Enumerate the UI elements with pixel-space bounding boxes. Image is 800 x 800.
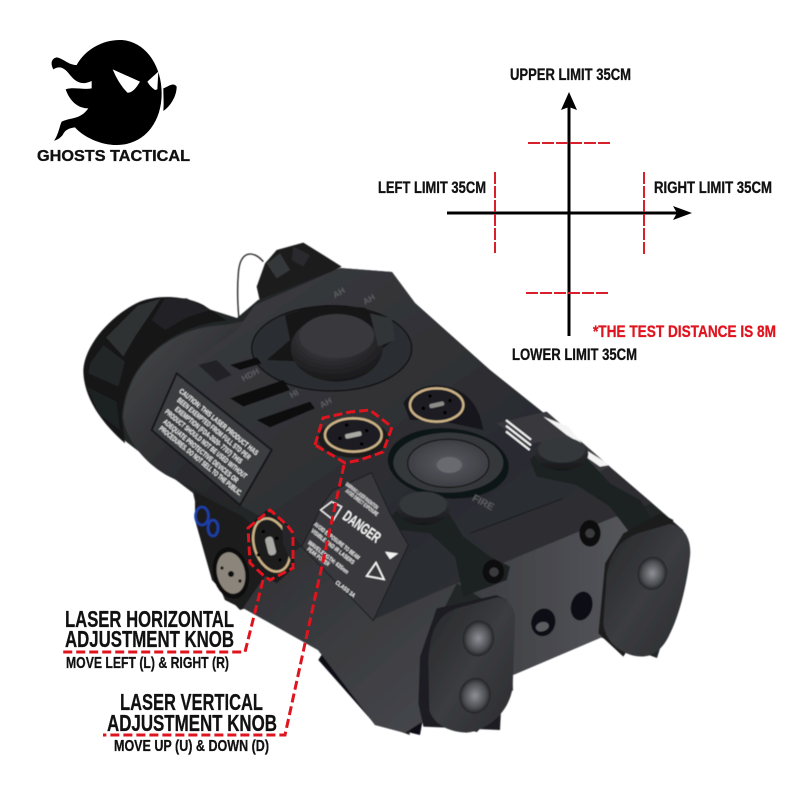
horizontal adjustment knob	[247, 510, 297, 583]
underside mount	[195, 492, 410, 735]
caution label: PROCEDURES. DO NOT SELL TO THE PUBLIC.	[157, 424, 244, 498]
body top surface	[152, 268, 652, 620]
text block: vertical adjustment knob	[107, 689, 277, 755]
danger label: DANGER	[339, 508, 384, 547]
vertical axis arrow	[561, 92, 577, 336]
fire button: FIRE	[470, 493, 496, 513]
danger label: AVOID EXPOSURE TO BEAM	[312, 522, 360, 561]
embossed mode markings: HDH	[240, 366, 261, 383]
blue adjuster bolts	[196, 507, 218, 536]
label: left limit: LEFT LIMIT 35CM	[378, 179, 486, 197]
label: upper limit: UPPER LIMIT 35CM	[510, 66, 631, 84]
caution label: ADEQUATE PROTECTIVE DEVICES OR	[161, 417, 241, 485]
callout: vertical knob highlight with leader	[103, 410, 392, 735]
caution label: CAUTION: THIS LASER PRODUCT HAS	[177, 387, 260, 457]
horizontal axis arrow	[447, 206, 692, 220]
upper adjustment knob	[403, 385, 483, 430]
front face	[457, 498, 640, 675]
text block: horizontal adjustment knob: MOVE LEFT (L) & RIGHT (R)	[66, 655, 229, 672]
logo wordmark: GHOSTS TACTICAL	[37, 148, 190, 165]
embossed mode markings	[240, 285, 377, 410]
chart: adjustment limits crosshair	[378, 66, 776, 364]
callout: horizontal knob highlight with leader	[62, 510, 293, 652]
mounting wheel	[208, 540, 268, 609]
product photo: laser aiming device	[83, 243, 690, 735]
caution label	[152, 373, 272, 505]
danger label: AVOID DIRECT EXPOSURE	[344, 489, 379, 518]
caution label: PRODUCT SHOULD NOT BE USED WITHOUT	[163, 407, 249, 481]
text block: vertical adjustment knob: ADJUSTMENT KNOB	[107, 710, 277, 736]
red limit dashes	[495, 143, 644, 293]
text block: vertical adjustment knob: MOVE UP (U) & DOWN (D)	[114, 738, 269, 755]
logo: Ghosts Tactical	[37, 40, 190, 165]
danger label: WARNING LASER RADIATION	[344, 482, 379, 511]
embossed mode markings: HI	[288, 387, 300, 400]
rotary switch and dome	[198, 285, 412, 427]
text block: vertical adjustment knob: LASER VERTICAL	[120, 689, 263, 715]
rear lens cap with lens	[598, 513, 690, 657]
vertical adjustment knob	[318, 418, 388, 458]
foot clamp	[318, 645, 423, 735]
danger label: CLASS 3A	[334, 580, 356, 600]
focus ring	[83, 297, 227, 443]
straps and rubber buttons	[392, 437, 657, 597]
icon: ghost mascot	[52, 40, 177, 145]
device base silhouette	[84, 268, 690, 733]
label: right limit: RIGHT LIMIT 35CM	[654, 179, 772, 197]
danger label: VISIBLE AND IR LASERS	[309, 529, 355, 566]
text block: horizontal adjustment knob	[65, 606, 234, 672]
upper mini label	[497, 412, 610, 473]
front lens cap with two lenses	[418, 595, 515, 733]
embossed mode markings: AH	[331, 285, 347, 300]
text block: horizontal adjustment knob: LASER HORIZONTAL	[65, 606, 234, 632]
embossed mode markings: AH	[318, 395, 334, 410]
text block: horizontal adjustment knob: ADJUSTMENT KNOB	[65, 626, 234, 652]
danger label: WAVELENGTH: 635nm	[306, 540, 349, 576]
lens housing neck	[123, 320, 290, 510]
fire button	[385, 423, 512, 513]
rear connector and wire	[238, 243, 342, 327]
caution label: BEEN EXEMPTED FROM FULL STD PER	[175, 396, 253, 462]
body side panel	[243, 545, 457, 733]
danger label	[302, 473, 408, 621]
embossed mode markings: AH	[361, 292, 377, 307]
label: lower limit: LOWER LIMIT 35CM	[512, 346, 637, 364]
caution label: EXEMPTION (FDA-2020- 7707) THIS	[173, 405, 244, 466]
danger label: PEAK POWER	[305, 547, 330, 568]
